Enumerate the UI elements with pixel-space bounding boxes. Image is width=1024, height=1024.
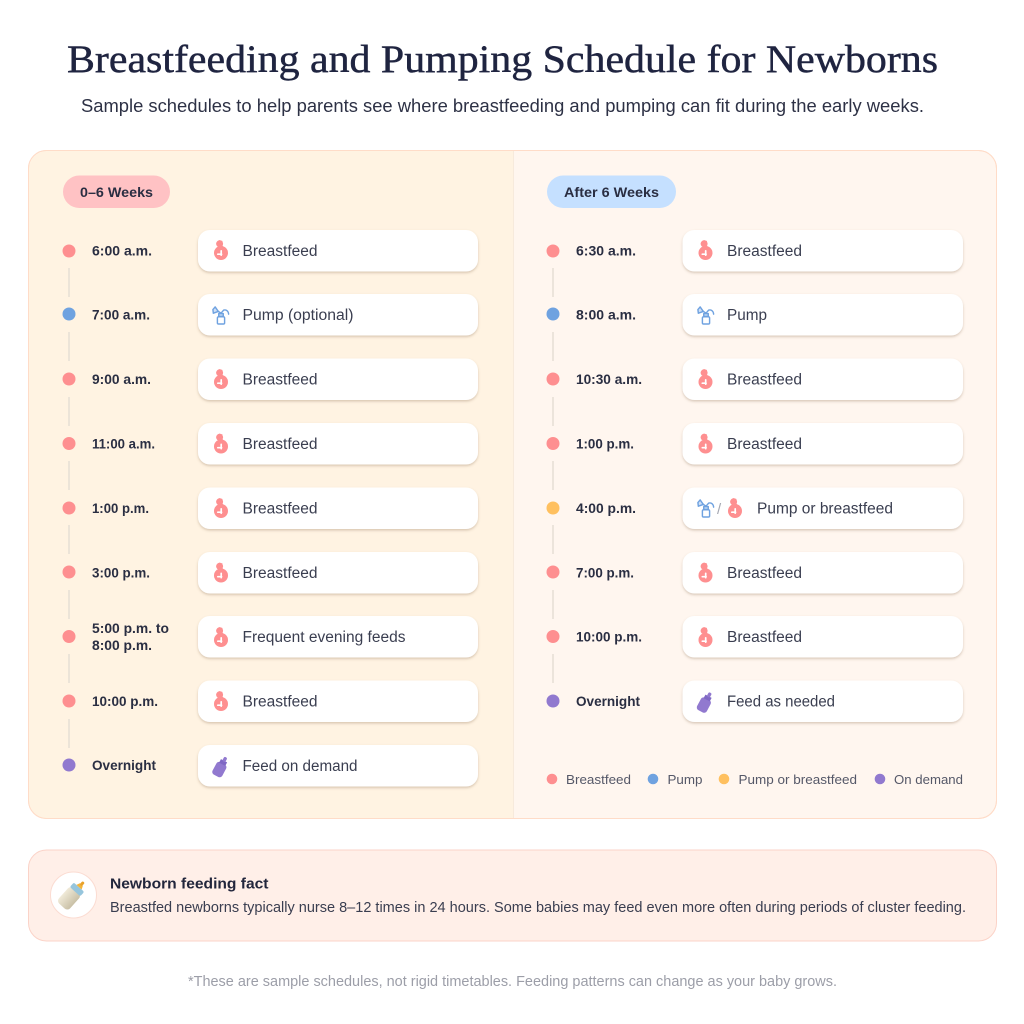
row: 5:00 p.m. to 8:00 p.m.: 8:00 p.m. (92, 637, 152, 653)
row: 6:00 a.m. (62, 230, 478, 272)
timeline connectors (552, 268, 554, 683)
row: 1:00 p.m. (62, 488, 478, 529)
row: 1:00 p.m.: Breastfeed (727, 436, 802, 453)
row: 3:00 p.m.: Breastfeed (242, 565, 318, 582)
legend: Pump (668, 772, 702, 787)
heading pill: 0-6 weeks (63, 176, 170, 208)
row: overnight: Feed as needed (727, 694, 835, 710)
panel: newborn feeding fact (28, 850, 996, 941)
heading pill: 0-6 weeks: 0–6 Weeks (80, 184, 153, 200)
row: 11:00 a.m.: 11:00 a.m. (92, 436, 155, 452)
row: 9:00 a.m.: 9:00 a.m. (92, 371, 151, 387)
row: 3:00 p.m.: 3:00 p.m. (92, 564, 150, 580)
row: 11:00 a.m. (62, 423, 478, 464)
row: 4:00 p.m.: / (717, 501, 722, 518)
row: 4:00 p.m. (546, 488, 963, 529)
row: 9:00 a.m. (62, 358, 478, 400)
row: 6:00 a.m.: 6:00 a.m. (92, 242, 152, 258)
row: 11:00 a.m.: Breastfeed (242, 436, 318, 453)
row: 10:00 p.m.: 10:00 p.m. (576, 628, 642, 644)
panel: 0-6 weeks (62, 176, 478, 786)
row: 8:00 a.m.: 8:00 a.m. (576, 306, 636, 322)
row: 6:30 a.m.: Breastfeed (727, 243, 802, 260)
row: 6:00 a.m.: Breastfeed (242, 243, 318, 260)
heading pill: after 6 weeks: After 6 Weeks (564, 184, 659, 200)
row: 7:00 a.m. (62, 294, 478, 336)
row: 7:00 p.m.: Breastfeed (727, 565, 802, 582)
panel: schedules (28, 150, 996, 818)
row: 6:30 a.m. (546, 230, 963, 272)
row: 6:30 a.m.: 6:30 a.m. (576, 242, 636, 258)
row: 5:00 p.m. to 8:00 p.m.: Frequent evening feeds (242, 629, 406, 646)
row: 3:00 p.m. (62, 552, 478, 594)
row: overnight (62, 745, 478, 786)
row: 7:00 a.m.: 7:00 a.m. (92, 306, 150, 322)
row: 1:00 p.m.: 1:00 p.m. (576, 436, 634, 452)
row: 8:00 a.m.: Pump (727, 307, 767, 324)
footnote: *These are sample schedules, not rigid timetables. Feeding patterns can change as your baby grows. (188, 974, 837, 990)
panel: after 6 weeks (546, 176, 963, 787)
row: 4:00 p.m.: 4:00 p.m. (576, 500, 636, 516)
row: overnight: Feed on demand (242, 758, 358, 775)
legend (547, 772, 963, 787)
row: 10:00 p.m. (62, 680, 478, 722)
timeline connectors (68, 268, 70, 748)
row: 5:00 p.m. to 8:00 p.m. (62, 616, 478, 658)
row: 10:30 a.m. (546, 358, 963, 400)
subtitle: Sample schedules to help parents see where breastfeeding and pumping can fit during the early weeks. (81, 96, 924, 116)
row: overnight: Overnight (92, 757, 156, 773)
row: 7:00 p.m. (546, 552, 963, 594)
row: 10:30 a.m.: Breastfeed (727, 372, 802, 388)
row: 7:00 p.m.: 7:00 p.m. (576, 564, 634, 580)
row: 1:00 p.m. (546, 423, 963, 464)
row: overnight: Overnight (576, 693, 640, 709)
row: 10:00 p.m.: 10:00 p.m. (92, 693, 158, 709)
legend: Breastfeed (566, 772, 631, 787)
row: overnight (546, 680, 963, 722)
row: 1:00 p.m.: Breastfeed (242, 500, 318, 518)
row: 1:00 p.m.: 1:00 p.m. (92, 500, 149, 516)
row: 10:30 a.m.: 10:30 a.m. (576, 371, 642, 387)
row: 10:00 p.m.: Breastfeed (727, 629, 802, 646)
row: 5:00 p.m. to 8:00 p.m.: 5:00 p.m. to (92, 620, 169, 636)
row: 10:00 p.m.: Breastfeed (242, 694, 318, 710)
row: 8:00 a.m. (546, 294, 963, 336)
row: 10:00 p.m. (546, 616, 963, 658)
row: 7:00 a.m.: Pump (optional) (242, 307, 354, 324)
heading pill: after 6 weeks (547, 176, 676, 208)
legend: On demand (894, 772, 963, 787)
fact heading: Newborn feeding fact (110, 876, 269, 892)
row: 9:00 a.m.: Breastfeed (242, 372, 318, 388)
icon: baby bottle (50, 872, 96, 918)
fact text: Breastfed newborns typically nurse 8–12 times in 24 hours. Some babies may feed even more often during periods of cluster feeding. (110, 900, 966, 916)
row: 4:00 p.m.: Pump or breastfeed (757, 500, 893, 518)
legend: Pump or breastfeed (738, 772, 857, 787)
title: Breastfeeding and Pumping Schedule for Newborns (67, 38, 938, 81)
